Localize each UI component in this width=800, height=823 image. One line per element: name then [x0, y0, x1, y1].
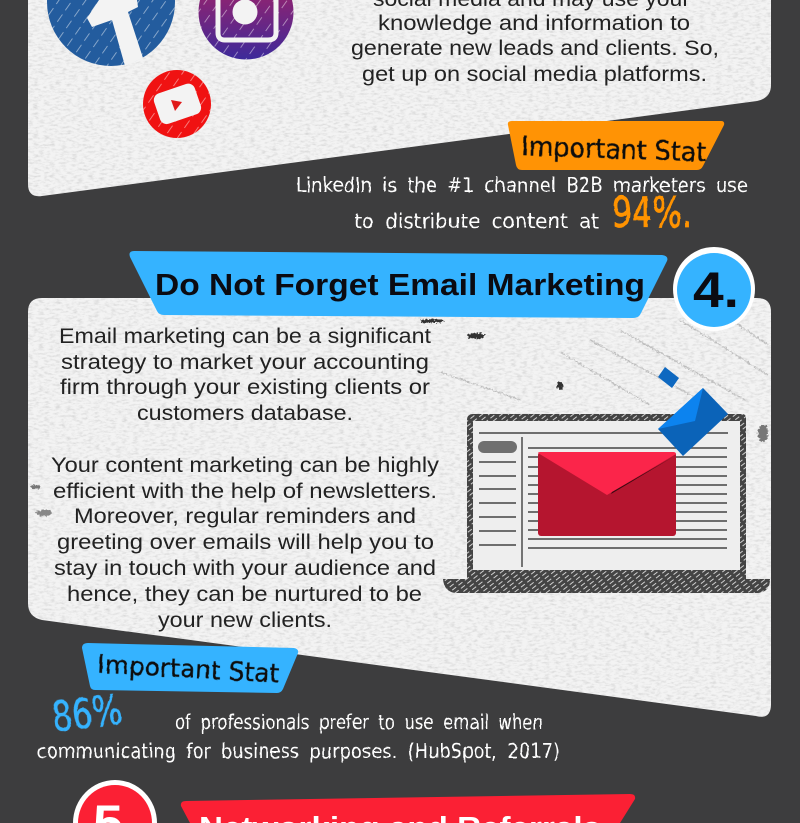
text: email paragraph: Moreover, regular reminders and [74, 505, 416, 528]
text: email paragraph [51, 325, 440, 632]
icon: facebook [47, 0, 175, 66]
heading: do not forget email marketing [130, 251, 667, 318]
text: email paragraph: hence, they can be nurtured to be [67, 583, 422, 606]
badge: important stat orange: Important Stat [521, 131, 707, 168]
icon: youtube [143, 70, 211, 138]
text: social media paragraph: knowledge and information to [378, 12, 690, 35]
text: social media paragraph: generate new leads and clients. So, [351, 37, 719, 60]
text: social media paragraph: get up on social media platforms. [362, 63, 707, 86]
text: email paragraph: your new clients. [158, 609, 332, 632]
panel: email marketing [28, 298, 771, 717]
text: email paragraph: customers database. [137, 402, 353, 425]
badge: number 4 [673, 247, 755, 331]
text: LinkedIn stat: 94%. [612, 188, 692, 237]
icon: instagram [198, 0, 294, 60]
badge: number 4: 4. [693, 262, 739, 318]
badge: number 5 [73, 780, 157, 823]
panel: social media [28, 0, 771, 196]
text: LinkedIn stat [296, 173, 748, 237]
text: email paragraph: stay in touch with your audience and [54, 557, 436, 580]
decorative speckle [31, 319, 768, 516]
text: LinkedIn stat: to distribute content at [354, 209, 599, 233]
text: email stat [37, 685, 560, 763]
text: email stat: communicating for business purposes. (HubSpot, 2017) [37, 739, 560, 763]
text: email paragraph: strategy to market your accounting [61, 351, 429, 374]
text: email stat: of professionals prefer to use email when [175, 710, 543, 734]
text: social media paragraph [351, 0, 719, 86]
text: email stat: 86% [49, 685, 125, 742]
text: email paragraph: firm through your existing clients or [60, 376, 430, 399]
text: email paragraph: Your content marketing can be highly [51, 454, 440, 477]
text: LinkedIn stat: LinkedIn is the #1 channel B2B marketers use [296, 173, 748, 197]
decorative scratches [440, 312, 768, 405]
text: email paragraph: Email marketing can be a significant [59, 325, 431, 348]
icon: laptop with envelopes [443, 367, 770, 593]
badge: important stat blue: Important Stat [97, 650, 280, 690]
text: email paragraph: efficient with the help of newsletters. [53, 480, 437, 503]
text: email paragraph: greeting over emails will help you to [57, 531, 434, 554]
heading: networking and referrals [181, 794, 635, 823]
heading: do not forget email marketing: Do Not Forget Email Marketing [155, 267, 645, 302]
